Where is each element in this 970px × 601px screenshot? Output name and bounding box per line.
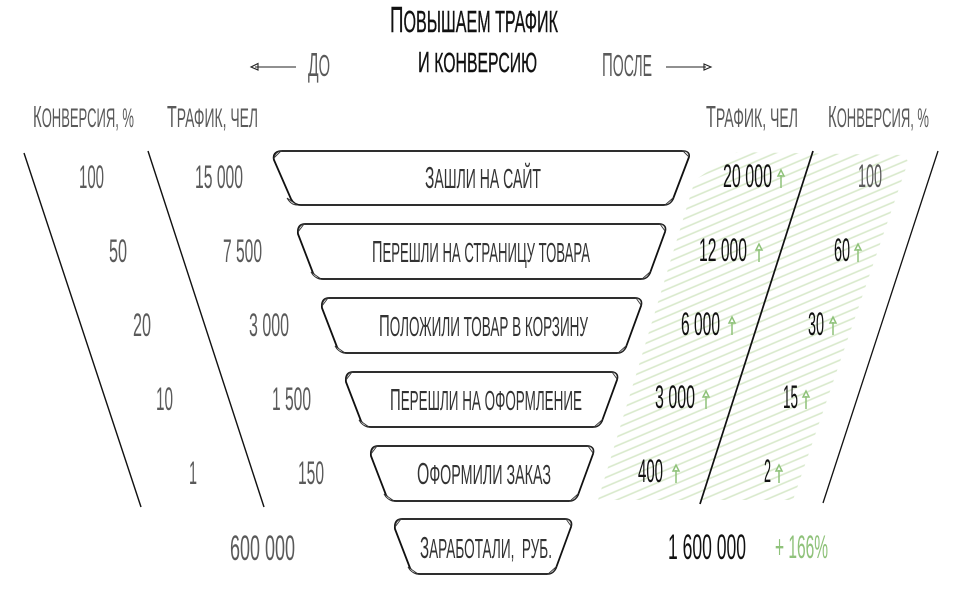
traffic values before: 3 000 — [249, 307, 289, 343]
label: before with arrow — [251, 46, 330, 83]
text: + 166% — [775, 529, 828, 565]
traffic values after: 3 000 — [655, 379, 695, 415]
column heading: conversion before: КОНВЕРСИЯ, % — [33, 99, 134, 134]
revenue after: 1 600 000 — [668, 528, 746, 567]
conversion values after: 30 — [808, 306, 824, 342]
text: 150 — [298, 455, 324, 491]
conversion values before — [79, 159, 197, 491]
conversion values before: 50 — [109, 233, 127, 269]
conversion values before: 20 — [133, 307, 151, 343]
traffic values after — [638, 158, 772, 489]
conversion values after — [764, 158, 882, 489]
column heading: traffic before: ТРАФИК, ЧЕЛ — [167, 99, 258, 134]
label: before with arrow: ДО — [308, 46, 330, 83]
column heading: traffic after: ТРАФИК, ЧЕЛ — [706, 99, 798, 134]
funnel step 6: ЗАРАБОТАЛИ, РУБ. — [420, 530, 552, 565]
traffic values before — [195, 159, 324, 491]
conversion values after: 2 — [764, 453, 771, 489]
traffic values after: 20 000 — [723, 158, 772, 194]
text: 100 — [858, 158, 882, 194]
text: 1 — [189, 455, 197, 491]
conversion values before: 100 — [79, 159, 104, 195]
funnel step 2 — [298, 224, 665, 279]
funnel step 3 — [322, 298, 641, 353]
funnel step 4: ПЕРЕШЛИ НА ОФОРМЛЕНИЕ — [390, 382, 582, 417]
traffic values before: 7 500 — [223, 233, 262, 269]
title: И КОНВЕРСИЮ — [418, 47, 537, 79]
funnel step 1: ЗАШЛИ НА САЙТ — [425, 160, 541, 195]
traffic values after: 6 000 — [681, 306, 720, 342]
label: after with arrow: ПОСЛЕ — [602, 46, 652, 83]
traffic values after: 400 — [638, 453, 663, 489]
funnel step 4 — [346, 372, 617, 427]
slanted divider lines — [24, 151, 938, 507]
funnel step 2: ПЕРЕШЛИ НА СТРАНИЦУ ТОВАРА — [372, 234, 590, 269]
conversion values before: 10 — [156, 381, 173, 417]
funnel step 5 — [371, 446, 593, 501]
title — [390, 0, 558, 79]
funnel step 3: ПОЛОЖИЛИ ТОВАР В КОРЗИНУ — [379, 308, 588, 343]
traffic values before: 1 500 — [272, 381, 311, 417]
funnel step 6 — [395, 519, 571, 574]
revenue before: 600 000 — [230, 529, 295, 568]
hatched background: after columns — [598, 152, 908, 500]
title: ПОВЫШАЕМ ТРАФИК — [390, 0, 558, 40]
traffic values after: 12 000 — [699, 232, 747, 268]
conversion values after: 15 — [783, 379, 798, 415]
funnel step 5: ОФОРМИЛИ ЗАКАЗ — [417, 456, 551, 491]
conversion values after: 60 — [834, 232, 850, 268]
traffic values before: 15 000 — [195, 159, 243, 195]
funnel step 1 — [274, 151, 689, 205]
icons: green up arrows — [673, 170, 861, 483]
